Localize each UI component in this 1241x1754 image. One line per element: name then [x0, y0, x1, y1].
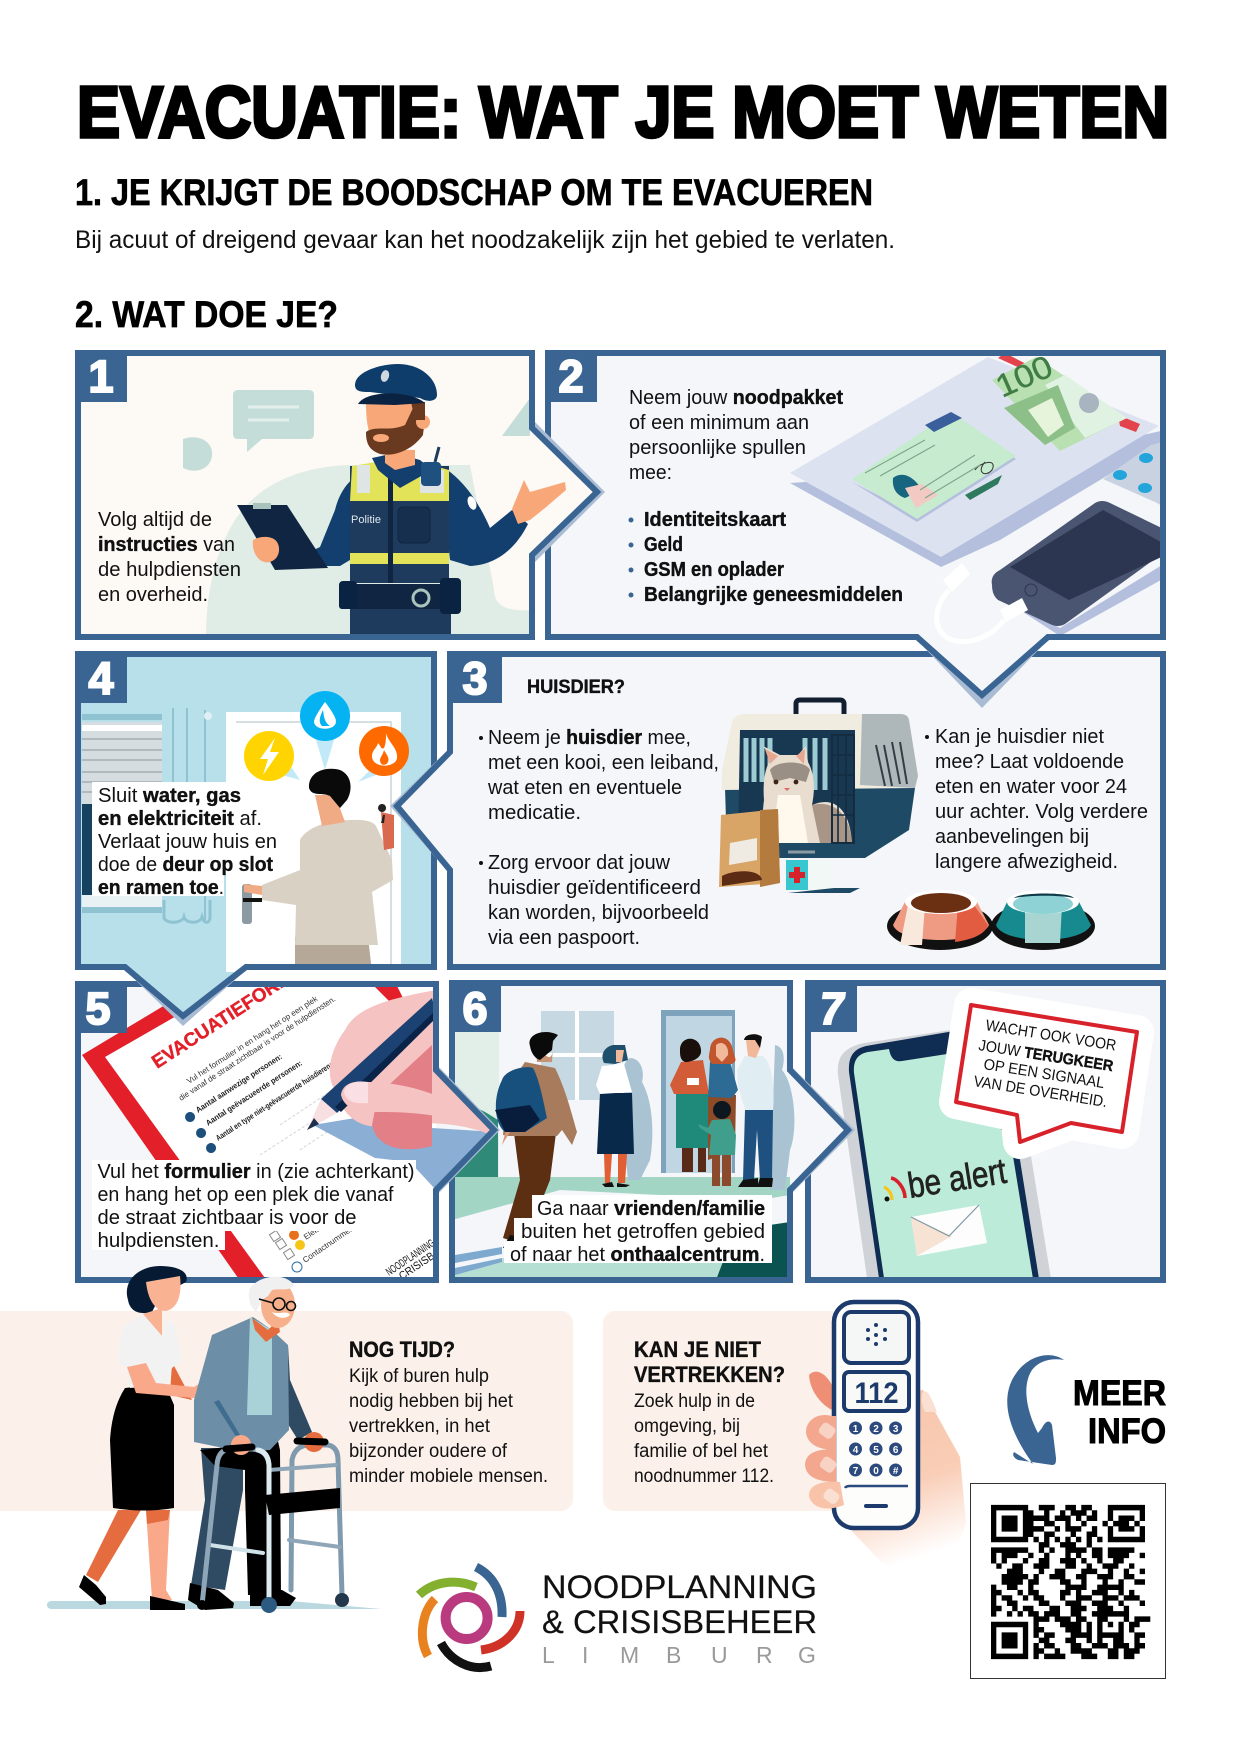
number tab 1: 1: [88, 351, 114, 402]
text block: pets right: aanbevelingen bij: [935, 826, 1089, 848]
glasses: [259, 1298, 296, 1310]
illustration: documents and money: [790, 348, 1170, 642]
logo mark: [419, 1567, 520, 1668]
text block: go to family: [504, 1195, 772, 1266]
keypad: 2: [873, 1424, 879, 1435]
illustration: evacuation form: Vul het formulier in en hang het op een plek: [185, 994, 320, 1086]
text block: close up: en ramen toe.: [98, 877, 224, 899]
smartphone and cable: [937, 501, 1170, 642]
intro text: Bij acuut of dreigend gevaar kan het noodzakelijk zijn het gebied te verlaten.: [75, 226, 895, 254]
keypad: [849, 1422, 902, 1477]
panel 5: form: [75, 981, 500, 1283]
keypad: 0: [873, 1466, 879, 1477]
text block: go to family: Ga naar vrienden/familie: [537, 1198, 765, 1220]
ground shadow: [47, 1601, 381, 1609]
text block: nog tijd: vertrekken, in het: [349, 1416, 491, 1437]
icon: phone with be alert: [838, 1030, 1052, 1285]
logo text: I: [582, 1642, 588, 1668]
logo text: R: [756, 1642, 773, 1668]
illustration: door: [226, 712, 401, 972]
heading: step 2: 2. WAT DOE JE?: [75, 294, 338, 335]
text block: fill in form: Vul het formulier in (zie achterkant): [98, 1161, 414, 1183]
callout: wait for signal: VAN DE OVERHEID.: [972, 1073, 1108, 1111]
illustration: evacuation form: Contactnummer:: [301, 1224, 356, 1265]
text block: instructions: Volg altijd de: [98, 509, 212, 531]
heading: meer info: INFO: [1088, 1412, 1166, 1451]
woman in skirt: [596, 1045, 634, 1187]
number tab 2: [545, 350, 597, 402]
right arm and hand: [440, 465, 566, 566]
text block: close up: [92, 782, 279, 899]
text block: emergency kit: persoonlijke spullen: [629, 437, 806, 459]
panel 2: emergency kit: [545, 348, 1170, 708]
callout: wait for signal: JOUW TERUGKEER: [977, 1037, 1114, 1075]
text block: emergency kit: [629, 387, 843, 484]
text block: nog tijd: bijzonder oudere of: [349, 1441, 508, 1462]
text block: pets right: mee? Laat voldoende: [935, 751, 1124, 773]
illustration: evacuation form: [82, 987, 490, 1277]
text block: kan je niet vertrekken: familie of bel het: [634, 1441, 769, 1462]
identity card: [852, 412, 1016, 522]
text block: fill in form: en hang het op een plek die vanaf: [98, 1184, 394, 1206]
text block: emergency kit: Neem jouw noodpakket: [629, 387, 843, 409]
text block: instructions: instructies van: [98, 534, 235, 556]
panel: nog tijd: [0, 1311, 573, 1511]
text block: close up: Sluit water, gas: [98, 785, 241, 807]
banknote: 100: [990, 348, 1058, 404]
callout: wait for signal: [956, 1005, 1137, 1142]
text block: kan je niet vertrekken: KAN JE NIET: [634, 1337, 762, 1362]
logo: noodplanning en crisisbeheer: [419, 1567, 817, 1668]
illustration: water bowl: [991, 890, 1095, 950]
text block: nog tijd: [349, 1337, 548, 1487]
text block: pets left: [479, 727, 719, 949]
man with backpack: [495, 1032, 577, 1248]
cat: [763, 746, 852, 843]
keypad: 4: [853, 1445, 859, 1456]
food bag: [719, 809, 780, 887]
list: kit items: Identiteitskaart: [644, 509, 786, 531]
text block: kan je niet vertrekken: [634, 1337, 785, 1487]
text block: pets left: medicatie.: [488, 802, 581, 824]
text block: pets right: Kan je huisdier niet: [935, 726, 1104, 748]
panel 3: pets: [390, 651, 1163, 967]
logo text: L: [542, 1642, 555, 1668]
text block: pets right: [925, 726, 1148, 873]
list: kit items: [628, 509, 903, 606]
illustration: man locking door: [244, 769, 394, 972]
number tab 3: [447, 651, 502, 704]
panel: kan je niet vertrekken: [603, 1311, 843, 1511]
logo text: U: [711, 1642, 728, 1668]
text block: instructions: en overheid.: [98, 584, 208, 606]
keypad: #: [893, 1466, 899, 1477]
number tab 6: [449, 980, 501, 1034]
heading: pets: HUISDIER?: [527, 676, 625, 698]
phone body: 112: [854, 1377, 898, 1410]
text block: fill in form: de straat zichtbaar is voor de: [98, 1207, 356, 1229]
man: [188, 1277, 312, 1610]
illustration: people at reception: [452, 1010, 794, 1280]
logo text: [542, 1569, 817, 1668]
keypad: 7: [853, 1466, 859, 1477]
fingers: [805, 1391, 937, 1508]
text block: instructions: [98, 509, 241, 606]
pills blister: [1103, 442, 1160, 504]
callout: wait for signal: OP EEN SIGNAAL: [982, 1056, 1106, 1092]
family group: [670, 1034, 774, 1187]
be alert logo: be alert: [905, 1150, 1009, 1206]
walker: [202, 1445, 342, 1605]
icon: electricity: [244, 731, 300, 781]
icon: gas flame: [358, 726, 409, 782]
illustration: cat carrier: [719, 700, 918, 893]
woman: [79, 1266, 217, 1610]
text block: go to family: of naar het onthaalcentrum.: [510, 1244, 765, 1266]
illustration: woman helping man with walker: [47, 1266, 381, 1613]
number tab 7: 7: [816, 983, 848, 1034]
heading: step 1: 1. JE KRIJGT DE BOODSCHAP OM TE EVACUEREN: [75, 172, 873, 213]
be alert logo: [883, 1160, 1008, 1202]
banknote: [990, 348, 1127, 451]
text block: fill in form: [92, 1160, 416, 1252]
text block: pets left: Zorg ervoor dat jouw: [488, 852, 671, 874]
illustration: evacuation form: die vanaf de straat zichtbaar is voor de hulpdiensten.: [177, 994, 337, 1103]
keypad: 3: [893, 1424, 899, 1435]
text block: go to family: buiten het getroffen gebied: [521, 1221, 765, 1243]
panel 4: close up home: [75, 651, 434, 1026]
text block: instructions: de hulpdiensten: [98, 559, 241, 581]
text block: pets left: via een paspoort.: [488, 927, 640, 949]
text block: pets left: met een kooi, een leiband,: [488, 752, 719, 774]
text block: fill in form: hulpdiensten.: [98, 1230, 220, 1252]
heading: meer info: MEER: [1073, 1374, 1166, 1413]
illustration: evacuation form: Aantal geëvacueerde personen:: [204, 1059, 304, 1128]
head: [355, 364, 437, 455]
number tab 3: 3: [462, 653, 488, 704]
text block: close up: doe de deur op slot: [98, 854, 273, 876]
panel 1: instructions: [75, 350, 605, 640]
illustration: evacuation form: EVACUATIEFORMULIER: [148, 936, 344, 1073]
illustration: evacuation form: Aantal aanwezige personen:: [194, 1052, 284, 1115]
keypad: 6: [893, 1445, 899, 1456]
text block: pets left: huisdier geïdentificeerd: [488, 877, 701, 899]
text block: kan je niet vertrekken: noodnummer 112.: [634, 1466, 774, 1487]
keypad: 5: [873, 1445, 879, 1456]
callout: wait for signal: WACHT OOK VOOR: [984, 1017, 1117, 1055]
text block: emergency kit: mee:: [629, 462, 672, 484]
text block: pets left: wat eten en eventuele: [487, 777, 682, 799]
number tab 5: [75, 981, 127, 1034]
illustration: police officer: Politie: [351, 514, 381, 526]
logo text: NOODPLANNING: [542, 1569, 817, 1605]
illustration: food bowl: [887, 890, 993, 950]
hand: [809, 1372, 966, 1577]
list: kit items: GSM en oplader: [644, 559, 784, 581]
hand writing: [307, 990, 495, 1190]
list: kit items: Belangrijke geneesmiddelen: [644, 584, 903, 606]
first aid kit: [786, 852, 860, 893]
belt: [339, 578, 461, 614]
phone body: [834, 1302, 918, 1528]
illustration: hand holding phone 112: [805, 1302, 966, 1577]
text block: pets left: kan worden, bijvoorbeeld: [488, 902, 709, 924]
number tab 6: 6: [462, 983, 488, 1034]
number tab 5: 5: [85, 983, 111, 1034]
logo text: G: [798, 1642, 816, 1668]
icon: envelope: [911, 1205, 987, 1256]
heading: meer info: [1073, 1374, 1166, 1451]
decorative speech bubble: [233, 390, 314, 452]
number tab 2: 2: [558, 351, 584, 402]
number tab 4: 4: [88, 653, 114, 704]
panel 7: be alert: [805, 980, 1163, 1285]
number tab 7: [805, 980, 857, 1034]
illustration: evacuation form: NOODPLANNING: [384, 1237, 437, 1278]
illustration: evacuation form: Elektr.: [302, 1222, 326, 1242]
list: kit items: Geld: [644, 534, 683, 556]
illustration: window blinds: [82, 708, 212, 922]
keypad: 1: [853, 1424, 859, 1435]
arrow: to QR code: [1007, 1355, 1064, 1465]
logo text: M: [620, 1642, 639, 1668]
text block: nog tijd: NOG TIJD?: [349, 1337, 455, 1362]
qr code: [970, 1484, 1166, 1678]
text block: kan je niet vertrekken: VERTREKKEN?: [634, 1362, 785, 1387]
text block: close up: en elektriciteit af.: [98, 808, 262, 830]
number tab 1: [75, 350, 127, 402]
text block: emergency kit: of een minimum aan: [629, 412, 809, 434]
text block: kan je niet vertrekken: omgeving, bij: [634, 1416, 740, 1437]
text block: pets right: uur achter. Volg verdere: [935, 801, 1148, 823]
text block: nog tijd: nodig hebben bij het: [349, 1391, 514, 1412]
text block: close up: Verlaat jouw huis en: [98, 831, 277, 853]
text block: nog tijd: minder mobiele mensen.: [349, 1466, 548, 1487]
clipboard and hand: [237, 503, 328, 570]
logo text: & CRISISBEHEER: [542, 1604, 817, 1640]
text block: pets right: langere afwezigheid.: [935, 851, 1118, 873]
text block: kan je niet vertrekken: Zoek hulp in de: [634, 1391, 755, 1412]
logo text: B: [666, 1642, 681, 1668]
number tab 4: [75, 651, 127, 704]
text block: pets left: Neem je huisdier mee,: [488, 727, 691, 749]
illustration: evacuation form: Aantal en type niet-geëvacueerde huisdieren:: [214, 1061, 334, 1143]
illustration: police officer: [237, 364, 566, 640]
icon: water: [300, 691, 350, 770]
illustration: evacuation form: CRISISB: [397, 1250, 437, 1282]
text block: nog tijd: Kijk of buren hulp: [349, 1366, 489, 1387]
text block: pets right: eten en water voor 24: [935, 776, 1127, 798]
panel 6: go to family: [449, 980, 855, 1280]
